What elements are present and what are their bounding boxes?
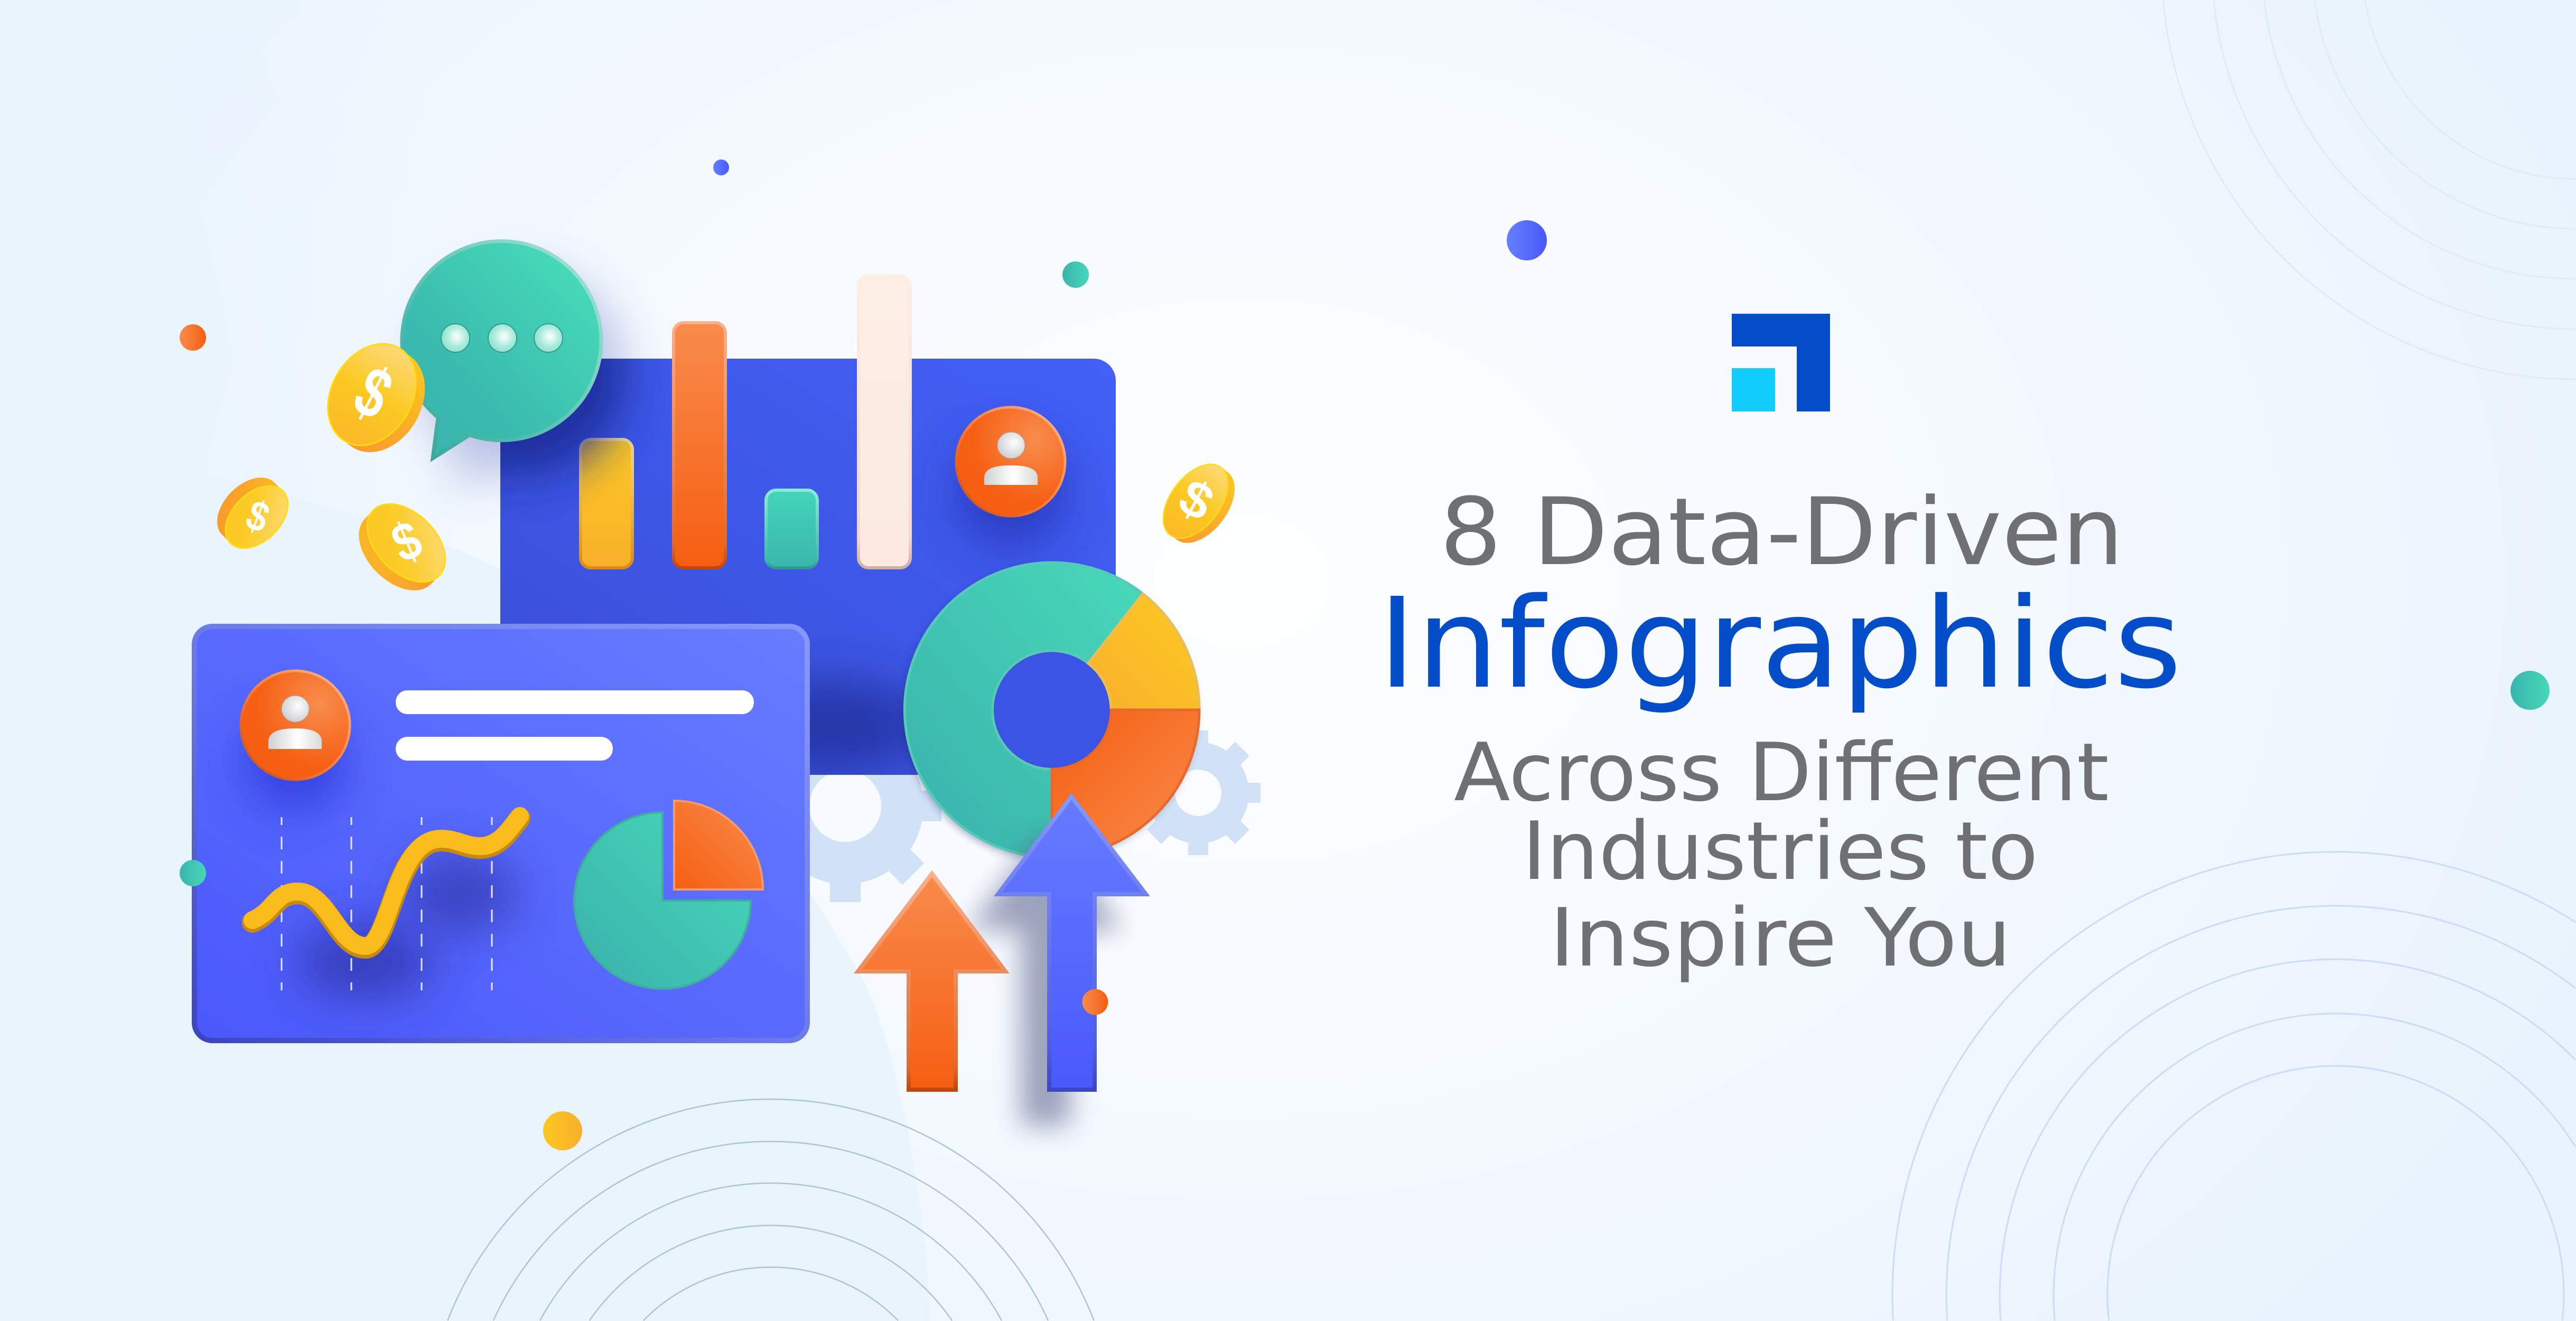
bar chart — [420, 270, 910, 568]
arrow: blue — [998, 797, 1146, 1090]
text placeholder bars — [396, 690, 754, 761]
icon: avatar on back panel — [956, 407, 1065, 516]
bar: orange — [674, 323, 725, 568]
icon: coin left: $ — [240, 491, 276, 542]
bar: teal — [766, 490, 817, 568]
faint speech bubble shadow outside panel — [420, 270, 623, 493]
teal edge dot — [180, 860, 206, 886]
panel: back dashboard — [500, 359, 1116, 775]
pie: orange slice — [674, 801, 763, 889]
icon: coin right — [1150, 453, 1248, 555]
shadows on back panel — [729, 436, 1066, 771]
bar: cream — [858, 276, 910, 568]
speech bubble — [402, 241, 601, 458]
icon: coin large — [310, 328, 443, 468]
icon: coin left — [206, 466, 300, 560]
pie: teal slice — [574, 812, 751, 989]
rings: top right — [2163, 0, 2576, 379]
logo — [1732, 314, 1830, 411]
donut chart — [903, 563, 1199, 859]
title line: Infographics: Infographics — [1378, 571, 2182, 716]
title line: Inspire You: Inspire You — [1550, 891, 2011, 985]
front panel shadows — [245, 710, 518, 998]
pie chart — [574, 801, 763, 989]
title line: Across Different: Across Different — [1454, 726, 2109, 819]
donut: teal segment — [904, 563, 1143, 857]
bar: yellow — [581, 439, 632, 568]
icon: large gear — [749, 710, 941, 902]
bubble dots — [441, 324, 563, 352]
rings: bottom right — [1892, 852, 2575, 1320]
title line: 8 Data-Driven: 8 Data-Driven — [1440, 478, 2124, 586]
orange dot on arrow — [1082, 989, 1108, 1015]
line chart — [253, 816, 520, 948]
background light blue shape — [0, 441, 929, 1321]
blue arrow shadow — [968, 828, 1123, 1126]
icon: coin large: $ — [342, 351, 404, 435]
title — [1378, 478, 2182, 985]
panel: front dashboard — [194, 626, 807, 1041]
icon: avatar on front panel — [241, 671, 350, 780]
donut: hole — [994, 652, 1109, 767]
floating dots — [180, 160, 2550, 1150]
icon: coin lower — [344, 489, 460, 605]
icon: coin right: $ — [1170, 467, 1222, 531]
title line: Industries to: Industries to — [1522, 804, 2038, 898]
arrow: orange — [858, 874, 1005, 1090]
donut: orange segment — [1052, 710, 1199, 857]
donut: yellow segment — [1088, 594, 1199, 710]
dashed gridlines — [282, 817, 492, 990]
icon: coin lower: $ — [383, 509, 430, 575]
background left tint — [0, 0, 475, 1321]
icon: small gear — [1136, 730, 1261, 855]
rings: bottom left — [447, 1099, 1094, 1320]
speech bubble shadow on panel — [500, 359, 649, 500]
